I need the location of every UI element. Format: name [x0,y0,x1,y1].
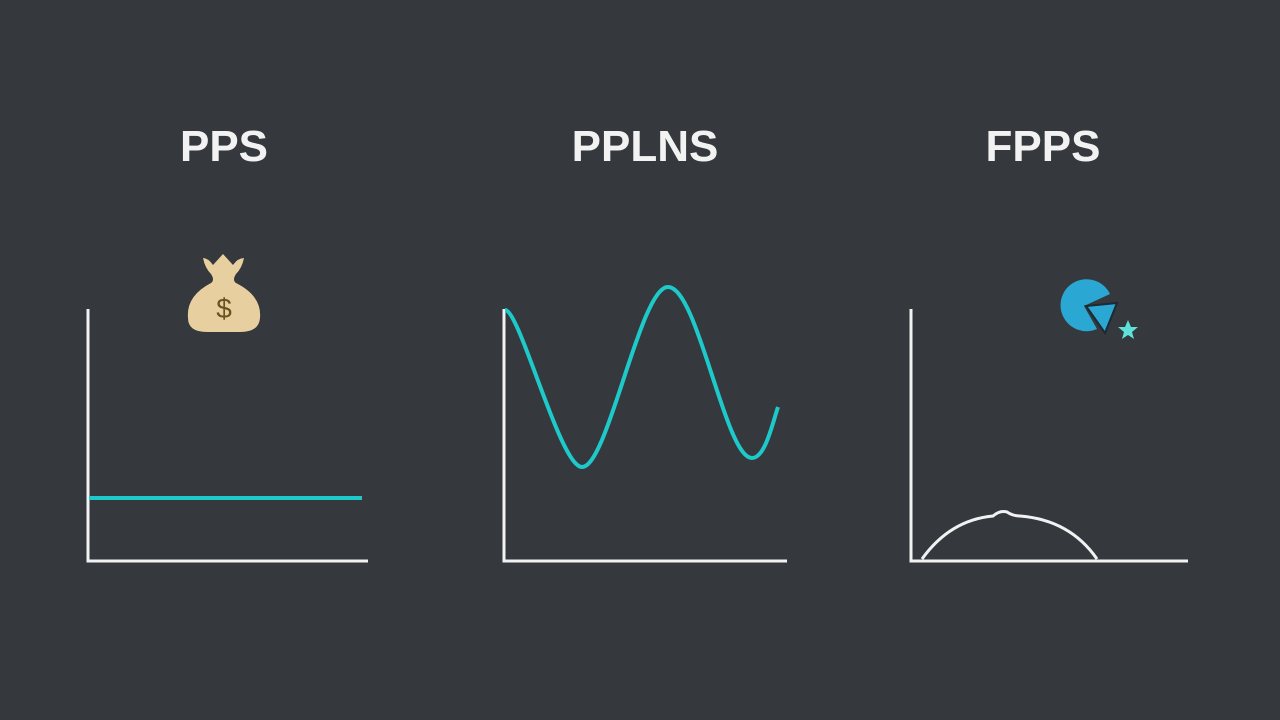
chart axes [911,309,1188,561]
icon: pie chart with star [1061,279,1138,339]
arc curve [922,512,1097,559]
panel: PPLNS [504,122,787,561]
chart axes [88,309,368,561]
title: FPPS: FPPS [986,122,1100,171]
panel: PPS [88,122,368,561]
icon: money bag: $ [216,293,232,324]
chart axes [504,309,787,561]
title: PPLNS: PPLNS [572,122,718,171]
title: PPS: PPS [180,122,268,171]
panel: FPPS [911,122,1188,561]
flat line [89,496,362,500]
wave line [505,287,778,467]
icon: money bag [188,254,260,332]
